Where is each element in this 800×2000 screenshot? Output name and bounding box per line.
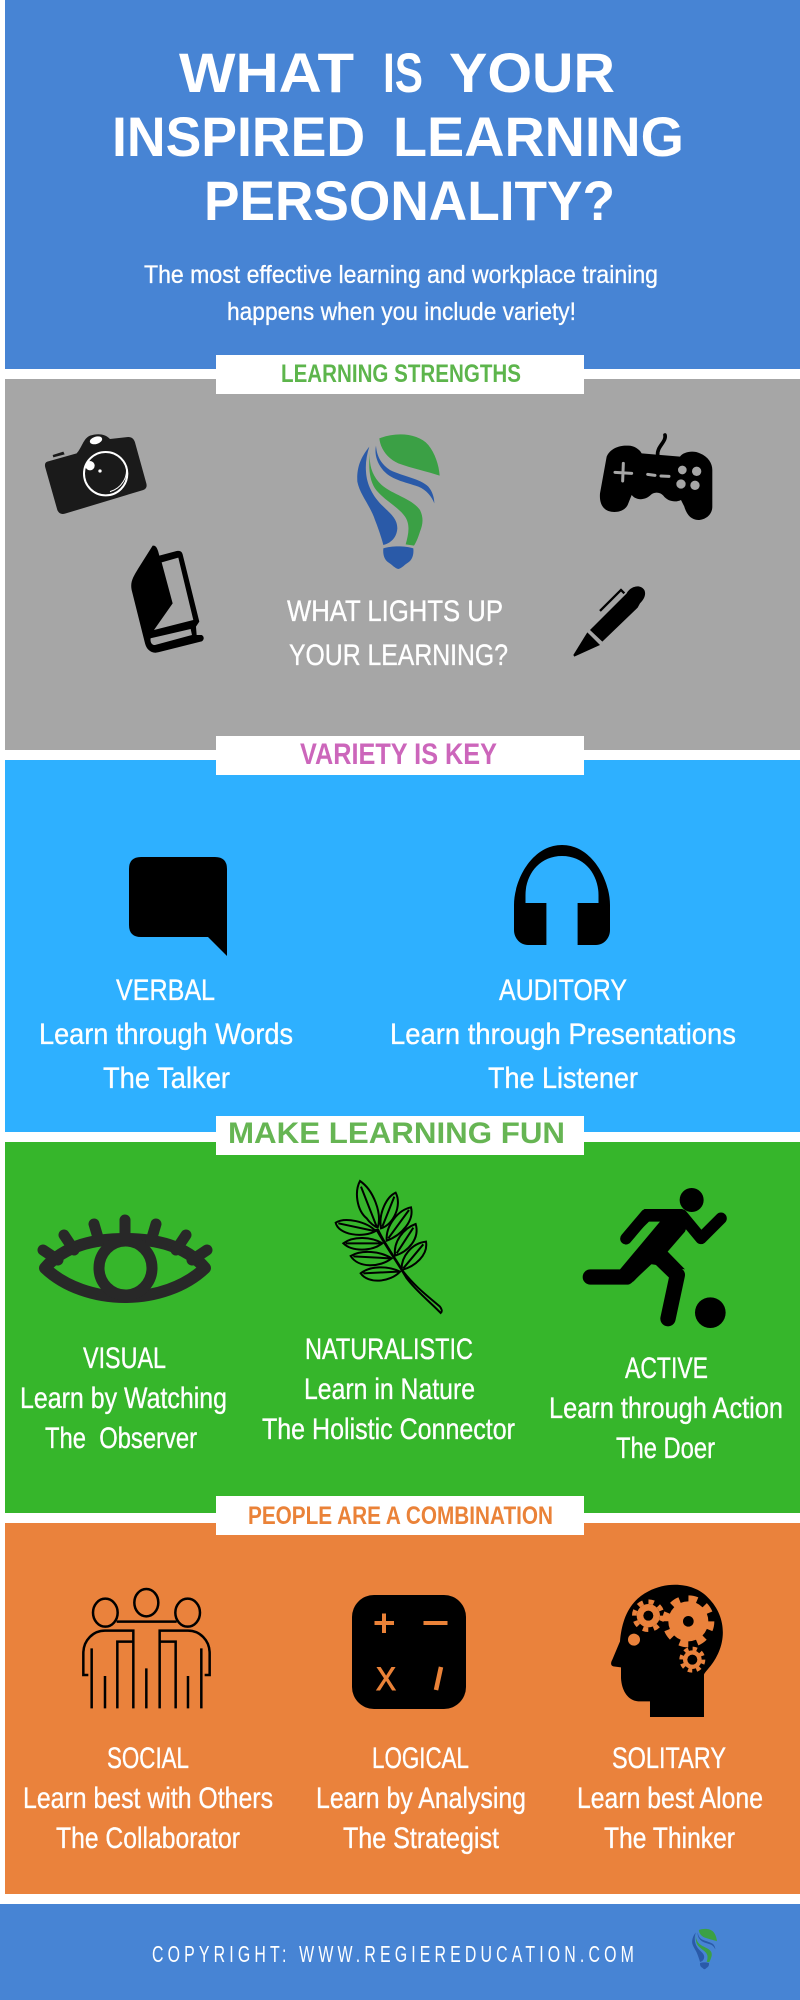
text: social: SOCIAL — [107, 1742, 189, 1775]
text: what lights up your learning: WHAT LIGHTS UP — [287, 595, 503, 628]
panel: footer background — [0, 1904, 800, 2000]
text: social — [23, 1742, 273, 1855]
heading: people are a combination: PEOPLE ARE A COMBINATION — [248, 1502, 553, 1530]
text: verbal — [39, 974, 293, 1095]
icon: camera — [45, 434, 147, 514]
panel: header background — [5, 0, 800, 369]
icon: book — [131, 546, 204, 653]
heading: make learning fun: MAKE LEARNING FUN — [228, 1117, 565, 1150]
icon: speech bubble — [129, 857, 227, 956]
title: IS — [383, 41, 423, 104]
text: logical — [316, 1742, 526, 1855]
subtitle: happens when you include variety! — [227, 298, 576, 326]
title: LEARNING — [393, 105, 684, 168]
text: naturalistic: The Holistic Connector — [262, 1413, 515, 1446]
subtitle: The most effective learning and workplace training — [144, 261, 658, 289]
text: logical: Learn by Analysing — [316, 1782, 526, 1815]
icon: head with gears — [611, 1585, 723, 1717]
title: YOUR — [449, 41, 615, 104]
text: solitary: Learn best Alone — [577, 1782, 763, 1815]
panel: learning strengths background — [5, 379, 800, 750]
text: what lights up your learning — [287, 595, 508, 672]
heading: variety is key: VARIETY IS KEY — [300, 738, 497, 771]
text: social: The Collaborator — [56, 1822, 240, 1855]
text: logical: LOGICAL — [372, 1742, 469, 1775]
text: active: The Doer — [616, 1432, 715, 1465]
text: what lights up your learning: YOUR LEARNING? — [289, 639, 508, 672]
text: solitary: The Thinker — [604, 1822, 735, 1855]
text: naturalistic: NATURALISTIC — [305, 1333, 473, 1366]
text: active: ACTIVE — [625, 1352, 708, 1385]
icon: calculator — [352, 1595, 466, 1709]
text: solitary: SOLITARY — [612, 1742, 726, 1775]
heading: learning strengths — [216, 355, 584, 394]
heading: people are a combination — [216, 1496, 584, 1535]
text: verbal: Learn through Words — [39, 1018, 293, 1051]
icon: pen — [573, 586, 645, 657]
text: social: Learn best with Others — [23, 1782, 273, 1815]
title: WHAT — [179, 41, 354, 104]
icon: eye — [43, 1220, 207, 1297]
panel: people are a combination background — [5, 1523, 800, 1894]
text: visual: Learn by Watching — [20, 1382, 227, 1415]
subtitle — [144, 261, 658, 326]
icon: light bulb logo — [357, 434, 440, 569]
icon: group of people — [83, 1589, 210, 1708]
icon: leaf sprig — [336, 1181, 442, 1313]
title: PERSONALITY? — [204, 169, 615, 232]
text: auditory: The Listener — [488, 1062, 638, 1095]
icon: runner with ball — [590, 1188, 726, 1328]
heading: variety is key — [216, 736, 584, 775]
text: logical: The Strategist — [343, 1822, 500, 1855]
title: INSPIRED — [112, 105, 365, 168]
text: auditory — [390, 974, 736, 1095]
icon: game controller — [600, 435, 712, 520]
heading: learning strengths: LEARNING STRENGTHS — [281, 360, 521, 388]
panel: make learning fun background — [5, 1142, 800, 1513]
text: active — [549, 1352, 783, 1465]
panel: variety is key background — [5, 760, 800, 1132]
text: naturalistic: Learn in Nature — [304, 1373, 475, 1406]
icon: calculator: X — [376, 1661, 396, 1697]
icon: footer bulb logo — [692, 1929, 717, 1969]
text: auditory: AUDITORY — [499, 974, 627, 1007]
title — [112, 41, 684, 232]
text: visual — [20, 1342, 227, 1455]
text: verbal: The Talker — [103, 1062, 230, 1095]
text: auditory: Learn through Presentations — [390, 1018, 736, 1051]
text: visual: The Observer — [45, 1422, 197, 1455]
text: solitary — [577, 1742, 763, 1855]
text: verbal: VERBAL — [116, 974, 215, 1007]
text: naturalistic — [262, 1333, 515, 1446]
text: visual: VISUAL — [83, 1342, 166, 1375]
icon: headphones — [514, 845, 610, 945]
